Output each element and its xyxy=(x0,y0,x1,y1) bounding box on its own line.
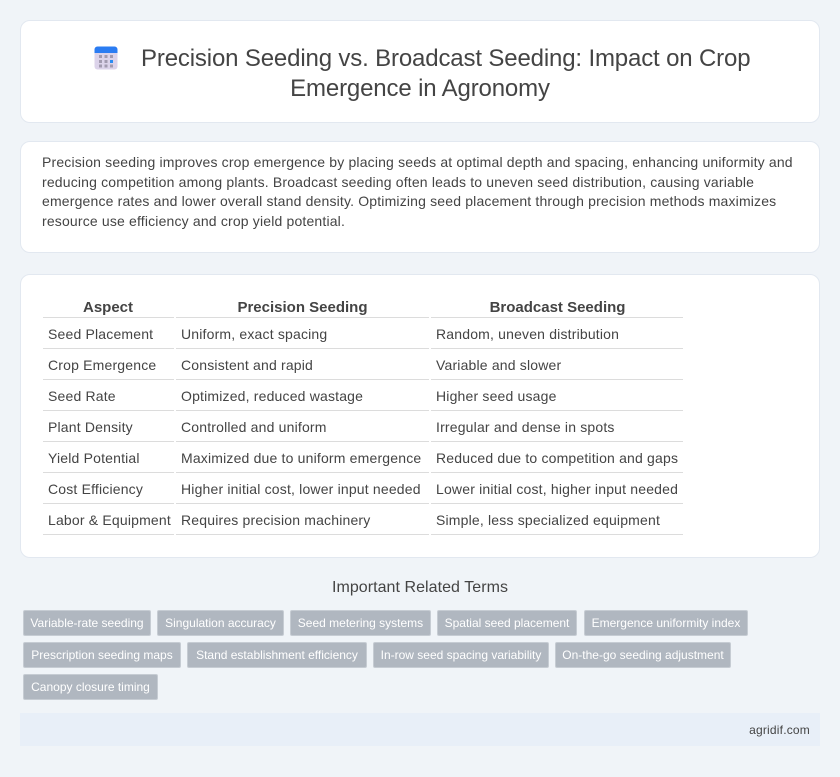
comparison table: Maximized due to uniform emergence xyxy=(181,450,421,466)
comparison table: Crop Emergence xyxy=(48,357,156,373)
summary paragraph xyxy=(42,154,793,229)
comparison table: Labor & Equipment xyxy=(48,512,171,528)
related term tags: Emergence uniformity index xyxy=(592,616,740,630)
comparison table: Requires precision machinery xyxy=(181,512,370,528)
comparison table: Uniform, exact spacing xyxy=(181,326,327,342)
related term tags: Singulation accuracy xyxy=(165,616,276,630)
icon: calendar xyxy=(94,46,118,70)
related term tags: Spatial seed placement xyxy=(445,616,569,630)
comparison table: Precision Seeding xyxy=(237,298,368,316)
related term tags: On-the-go seeding adjustment xyxy=(562,648,724,662)
panel: title header xyxy=(20,20,820,123)
summary paragraph: reducing competition among plants. Broadcast seeding often leads to uneven seed distribution, causing variable xyxy=(42,174,754,190)
related term tags: Canopy closure timing xyxy=(31,680,150,694)
comparison table: Plant Density xyxy=(48,419,133,435)
comparison table: Simple, less specialized equipment xyxy=(436,512,660,528)
title: Precision Seeding vs. Broadcast Seeding: Impact on Crop xyxy=(141,45,750,72)
related term tags: Prescription seeding maps xyxy=(31,648,173,662)
title: Emergence in Agronomy xyxy=(290,75,550,102)
related term tags: In-row seed spacing variability xyxy=(381,648,541,662)
comparison table: Higher initial cost, lower input needed xyxy=(181,481,421,497)
related term tags xyxy=(23,610,748,700)
summary paragraph: emergence rates and lower overall stand density. Optimizing seed placement through precision methods maximizes xyxy=(42,193,776,209)
comparison table xyxy=(43,298,683,535)
comparison table: Higher seed usage xyxy=(436,388,557,404)
comparison table: Optimized, reduced wastage xyxy=(181,388,363,404)
comparison table: Irregular and dense in spots xyxy=(436,419,615,435)
title xyxy=(141,45,750,102)
summary paragraph: Precision seeding improves crop emergence by placing seeds at optimal depth and spacing, enhancing uniformity and xyxy=(42,154,793,170)
related term tags: Seed metering systems xyxy=(298,616,423,630)
comparison table: Lower initial cost, higher input needed xyxy=(436,481,678,497)
comparison table: Controlled and uniform xyxy=(181,419,327,435)
panel: comparison table xyxy=(20,274,820,558)
comparison table: Yield Potential xyxy=(48,450,140,466)
related term tags: Variable-rate seeding xyxy=(30,616,144,630)
comparison table: Broadcast Seeding xyxy=(490,298,625,316)
footer source: agridif.com xyxy=(749,723,810,737)
comparison table: Random, uneven distribution xyxy=(436,326,619,342)
comparison table: Cost Efficiency xyxy=(48,481,143,497)
comparison table: Variable and slower xyxy=(436,357,561,373)
comparison table: Seed Rate xyxy=(48,388,116,404)
related term tags: Stand establishment efficiency xyxy=(196,648,358,662)
footer bar xyxy=(20,713,820,746)
panel: summary text xyxy=(20,141,820,253)
summary paragraph: resource use efficiency and crop yield potential. xyxy=(42,213,345,229)
heading: related terms: Important Related Terms xyxy=(332,579,508,596)
comparison table: Seed Placement xyxy=(48,326,153,342)
comparison table: Reduced due to competition and gaps xyxy=(436,450,678,466)
comparison table: Aspect xyxy=(83,298,133,316)
comparison table: Consistent and rapid xyxy=(181,357,313,373)
